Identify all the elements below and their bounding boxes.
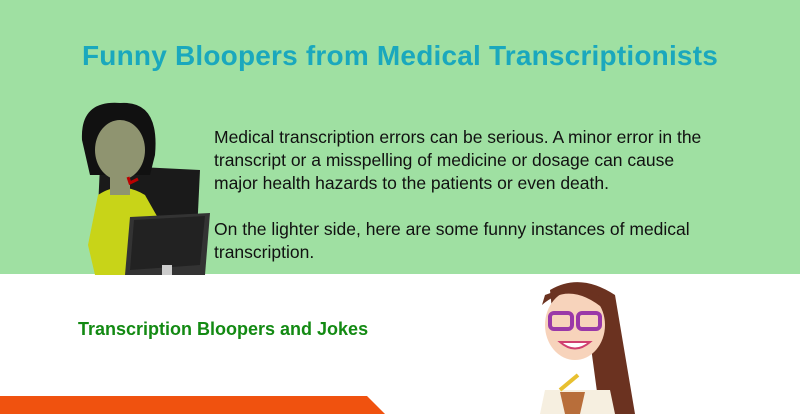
illustration: woman with glasses (540, 282, 635, 414)
intro text (214, 127, 701, 262)
orange bar (0, 396, 385, 414)
illustration: transcriptionist at monitor (82, 102, 210, 275)
title: Funny Bloopers from Medical Transcriptionists (82, 40, 718, 71)
intro text: Medical transcription errors can be serious. A minor error in the transcript or a misspelling of medicine or dosage can cause major health hazards to the patients or even death. (214, 127, 701, 193)
subheading: Transcription Bloopers and Jokes (78, 319, 368, 339)
header band (0, 0, 800, 274)
intro text: On the lighter side, here are some funny instances of medical transcription. (214, 219, 690, 262)
